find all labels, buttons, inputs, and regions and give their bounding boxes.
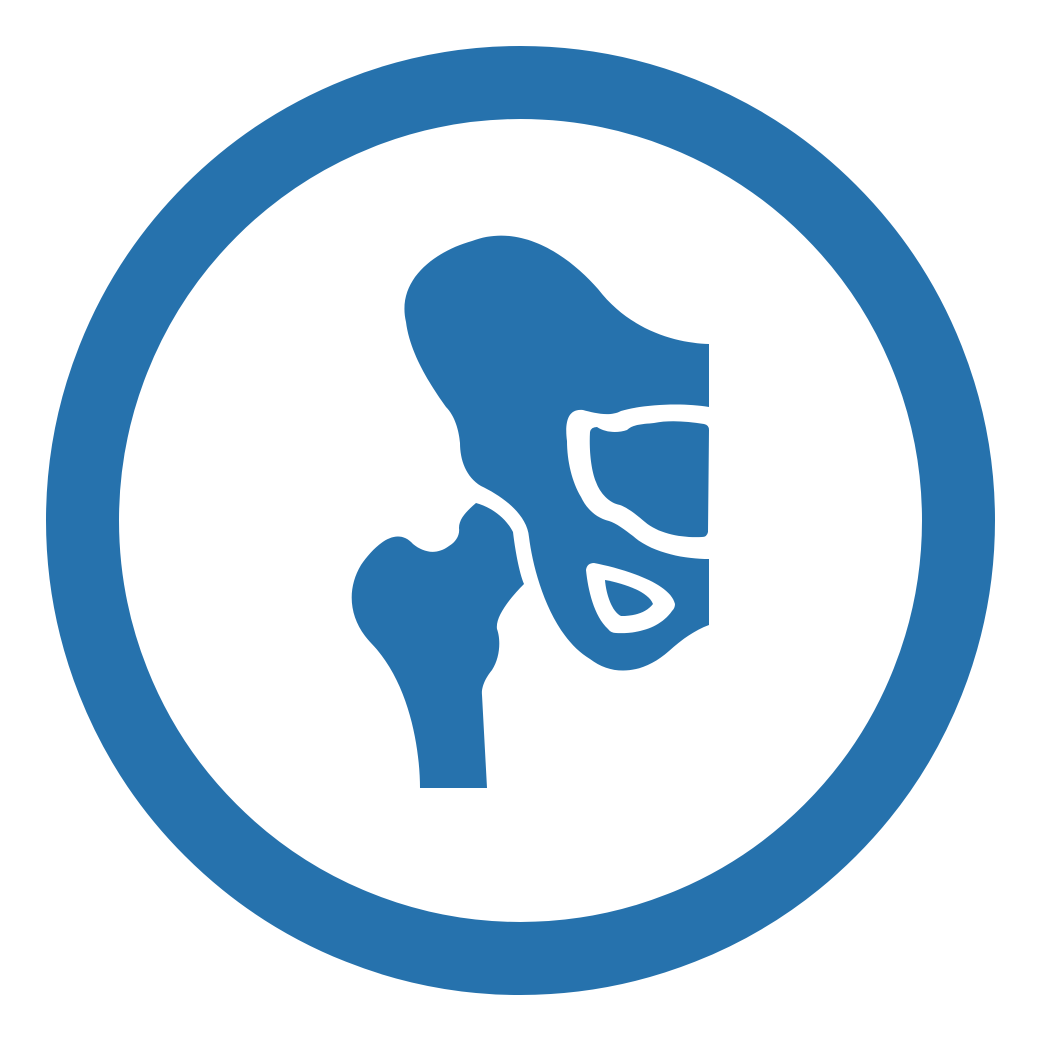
pelvis socket inner [590, 421, 709, 537]
femur [352, 503, 524, 788]
pelvis bone [404, 236, 709, 671]
icon: hip joint [352, 236, 709, 788]
obturator foramen inner [605, 580, 653, 616]
icon: circular ring [82, 82, 958, 958]
obturator foramen cut-out ring [586, 563, 675, 633]
